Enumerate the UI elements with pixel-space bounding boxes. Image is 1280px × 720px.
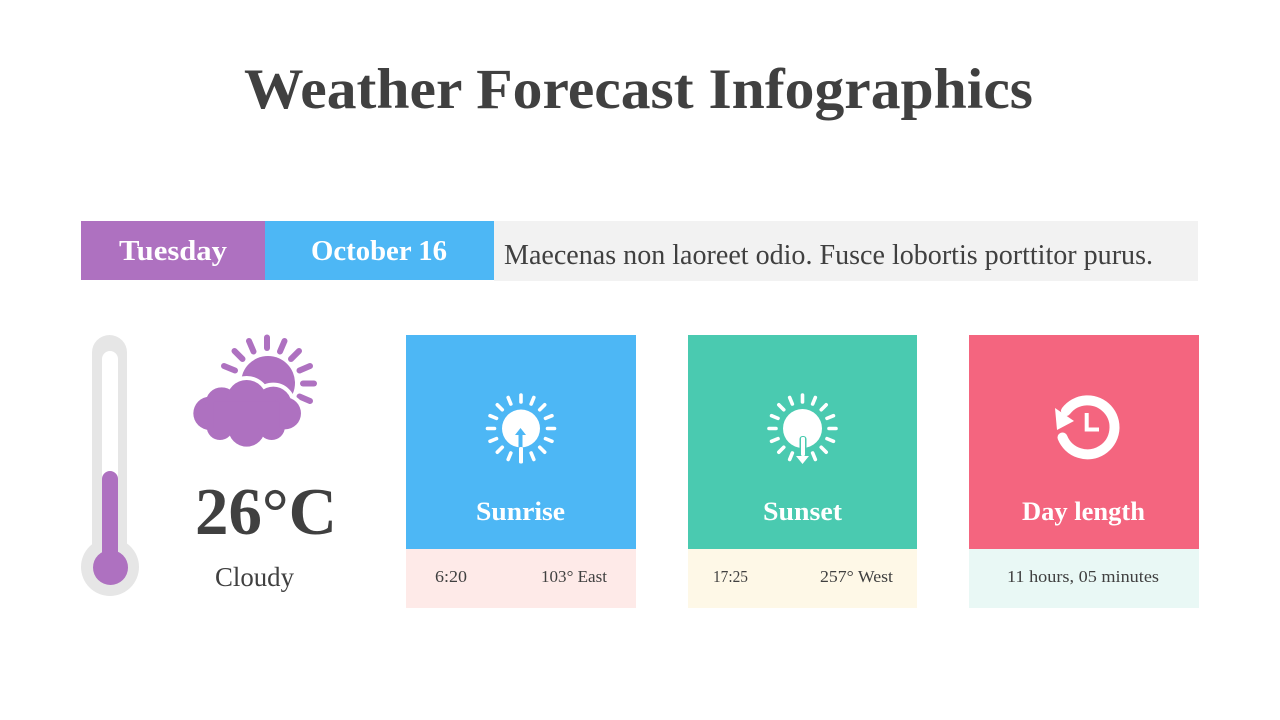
temperature: 26°C — [195, 475, 337, 549]
sunrise label: Sunrise — [476, 497, 565, 526]
sunset details: 257° West — [820, 567, 893, 586]
title: Weather Forecast Infographics — [244, 58, 1033, 121]
day label: Tuesday — [119, 235, 228, 267]
day length details — [969, 549, 1199, 608]
icon: sunrise — [488, 395, 554, 464]
day label — [81, 221, 265, 280]
sunrise details — [406, 549, 636, 608]
icon: clock with return arrow — [1055, 400, 1115, 454]
sunset details: 17:25 — [713, 567, 748, 586]
thermometer — [81, 335, 139, 596]
date label — [265, 221, 494, 280]
banner description — [494, 221, 1198, 281]
date label: October 16 — [311, 235, 447, 267]
icon: sunset — [769, 395, 836, 464]
sunrise details: 6:20 — [435, 567, 467, 586]
condition label: Cloudy — [215, 562, 294, 592]
panel: sunset — [688, 335, 917, 608]
panel: day length — [969, 335, 1199, 608]
sunset details — [688, 549, 917, 608]
date banner — [81, 221, 1198, 281]
day length label: Day length — [1022, 497, 1146, 526]
panel: sunrise — [406, 335, 636, 608]
icon: cloud and sun — [193, 338, 314, 447]
sunset label: Sunset — [763, 497, 842, 526]
banner description: Maecenas non laoreet odio. Fusce lobortis porttitor purus. — [504, 240, 1153, 271]
day length details: 11 hours, 05 minutes — [1007, 567, 1159, 586]
sunrise details: 103° East — [541, 567, 607, 586]
